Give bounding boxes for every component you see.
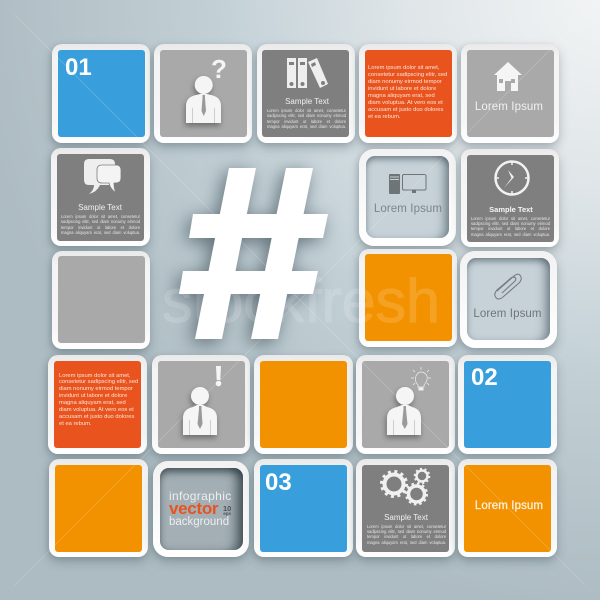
tile: person with light bulb	[356, 355, 455, 454]
text block: sadipscing elitr, sed diam nonumy eirmod	[367, 529, 446, 534]
text block: Lorem ipsum dolor sit amet, consetetur	[61, 214, 140, 219]
label: Lorem Ipsum	[475, 101, 543, 113]
number 02: 02	[471, 364, 498, 391]
text block: Lorem ipsum dolor sit amet, consetetur	[367, 524, 446, 528]
text block: magna aliquyam erat, sed diam voluptua.	[61, 230, 140, 235]
tile: clock	[461, 149, 559, 247]
text block: magna aliquyam erat, sed diam voluptua.	[367, 540, 446, 545]
text block	[59, 372, 138, 427]
icon: person question	[182, 54, 227, 129]
text block	[367, 524, 446, 545]
text block: tempor invidunt ut labore et dolore	[367, 534, 446, 539]
icon: speech bubbles	[84, 159, 121, 194]
text block: consetetur sadipscing elitr, sed	[368, 72, 447, 78]
text block: diam voluptua. At vero eos et	[59, 407, 134, 413]
text block: diam voluptua. At vero eos et	[368, 100, 443, 106]
text block: invidunt ut labore et dolore	[59, 393, 127, 399]
text block: magna aliquyam erat, sed diam voluptua.	[471, 232, 550, 237]
text block: tempor invidunt ut labore et dolore	[61, 225, 140, 230]
text: 10 eps: eps	[223, 511, 231, 516]
text block: Lorem ipsum dolor sit amet,	[59, 372, 131, 378]
text block: magna aliquyam erat, sed	[368, 93, 435, 99]
text block: sadipscing elitr, sed diam nonumy eirmod	[471, 221, 550, 226]
heading: sample text: Sample Text	[489, 205, 533, 214]
label: Lorem Ipsum	[374, 203, 442, 215]
icon: paperclip	[494, 274, 522, 300]
tile: gears	[356, 459, 455, 557]
text: infographic: infographic	[169, 489, 232, 503]
icon: computer	[389, 174, 426, 194]
text block: magna aliquyam erat, sed diam voluptua.	[267, 124, 346, 129]
text block: tempor invidunt ut labore et dolore	[267, 119, 346, 124]
icon: house	[494, 62, 522, 91]
text: 10 eps: 10	[223, 504, 231, 513]
label: Lorem Ipsum	[473, 308, 542, 320]
tile: orange blank	[254, 355, 353, 454]
heading: sample text: Sample Text	[78, 203, 122, 212]
heading: sample text: Sample Text	[285, 97, 329, 106]
tile: orange blank	[49, 459, 148, 557]
tile: hollow paperclip	[460, 251, 557, 348]
text block: sadipscing elitr, sed diam nonumy eirmod	[267, 113, 346, 118]
text block	[368, 65, 447, 120]
label: Lorem Ipsum	[475, 500, 543, 512]
text: background: background	[169, 516, 229, 528]
text block: Lorem ipsum dolor sit amet,	[368, 65, 440, 71]
text block: magna aliquyam erat, sed	[59, 400, 126, 406]
text block	[61, 214, 140, 235]
tile: red text 2	[48, 355, 147, 454]
tile: hollow computer	[359, 149, 456, 246]
text block: accusam et justo duo dolores	[59, 414, 134, 420]
text block	[267, 108, 346, 129]
tile: orange lorem ipsum	[458, 459, 557, 557]
heading: sample text: Sample Text	[384, 513, 428, 522]
text block: accusam et justo duo dolores	[368, 107, 443, 113]
text block: Lorem ipsum dolor sit amet, consetetur	[471, 216, 550, 220]
tile: 03 blue	[254, 459, 353, 557]
text: vector: vector	[169, 499, 218, 518]
tile: speech bubbles	[51, 148, 150, 246]
icon: person exclamation	[179, 366, 222, 441]
icon: person question: ?	[211, 54, 227, 84]
tile: binders sample text	[257, 44, 355, 143]
tile: person with exclamation	[152, 355, 250, 454]
tile: grey blank	[52, 251, 150, 349]
text block: sadipscing elitr, sed diam nonumy eirmod	[61, 219, 140, 224]
text block: consetetur sadipscing elitr, sed	[59, 379, 138, 385]
tile: person with question mark	[154, 44, 252, 143]
text block: diam nonumy eirmod tempor	[368, 79, 442, 85]
tile: 01 blue	[52, 44, 150, 143]
icon: gears	[380, 468, 430, 506]
number 03: 03	[265, 469, 292, 496]
tile: 02 blue	[458, 355, 557, 454]
tile: red text 1	[359, 44, 457, 143]
text block: tempor invidunt ut labore et dolore	[471, 226, 550, 231]
icon: person with bulb	[383, 367, 431, 441]
text block: et ea rebum.	[368, 114, 401, 120]
icon: clock	[494, 160, 530, 196]
text block: invidunt ut labore et dolore	[368, 86, 436, 92]
text block: diam nonumy eirmod tempor	[59, 386, 133, 392]
icon: binders	[287, 58, 328, 88]
text block	[471, 216, 550, 237]
watermark: stockfresh	[162, 267, 440, 335]
number 01: 01	[65, 54, 92, 81]
tile: hollow infographic label	[153, 461, 249, 557]
text block: Lorem ipsum dolor sit amet, consetetur	[267, 108, 346, 113]
text block: et ea rebum.	[59, 421, 92, 427]
tile: orange blank	[359, 249, 457, 347]
tile: house	[461, 44, 559, 143]
